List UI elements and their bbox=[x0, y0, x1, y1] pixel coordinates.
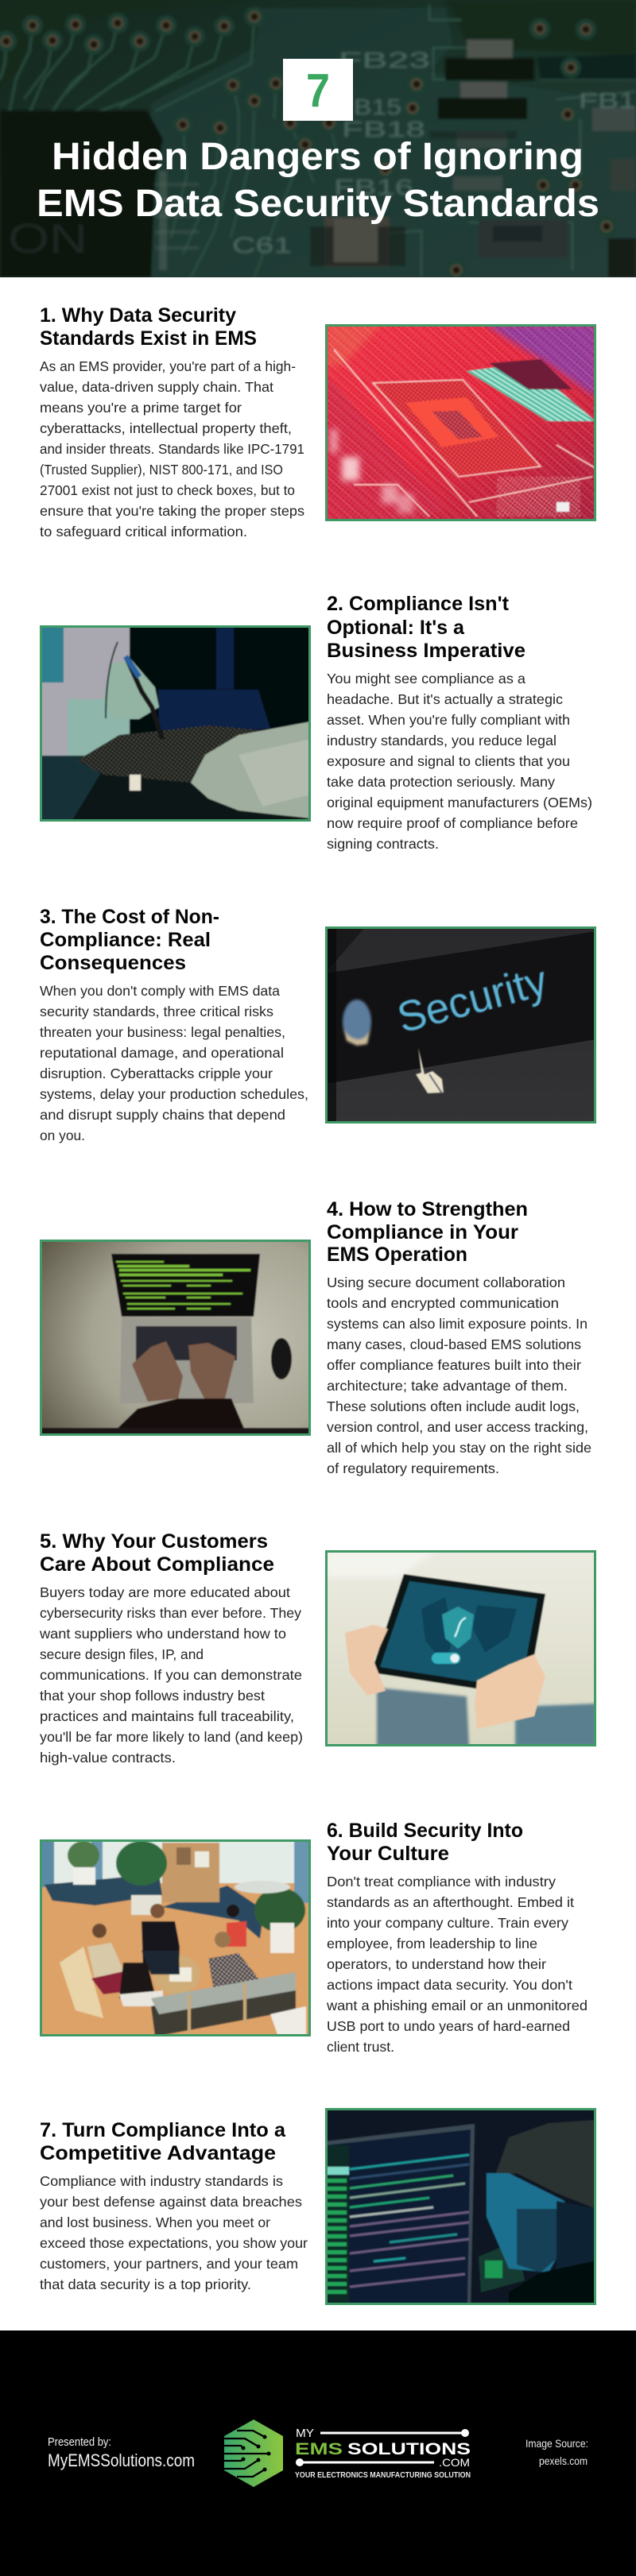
heading 1: Standards Exist in EMS bbox=[40, 327, 257, 350]
hero banner bbox=[0, 0, 636, 280]
body text 5: high-value contracts. bbox=[40, 1750, 176, 1766]
body text 2: take data protection seriously. Many bbox=[327, 774, 555, 790]
photo: security on screen with cursor: Security bbox=[393, 957, 553, 1042]
body text 6: want a phishing email or an unmonitored bbox=[326, 1998, 588, 2013]
body text 4 bbox=[327, 1274, 591, 1476]
title: Hidden Dangers of Ignoring bbox=[52, 136, 584, 178]
body text 4: Using secure document collaboration bbox=[327, 1274, 565, 1290]
heading 3: Consequences bbox=[40, 952, 186, 974]
body text 6 bbox=[326, 1874, 588, 2055]
body text 7: and lost business. When you meet or bbox=[40, 2214, 270, 2230]
heading 3: 3. The Cost of Non- bbox=[40, 906, 219, 928]
photo: soldering a circuit board bbox=[40, 625, 311, 822]
image source: pexels.com bbox=[539, 2454, 588, 2467]
body text 5: that your shop follows industry best bbox=[40, 1688, 265, 1704]
logo wordmark: SOLUTIONS bbox=[347, 2440, 471, 2458]
photo: hands typing on laptop bbox=[40, 1240, 311, 1436]
body text 4: many cases, cloud-based EMS solutions bbox=[327, 1336, 581, 1352]
title bbox=[37, 136, 599, 225]
panel: section 7 competitive advantage bbox=[40, 2108, 596, 2305]
panel: section 2 compliance imperative bbox=[40, 593, 592, 852]
heading 6: Your Culture bbox=[327, 1843, 449, 1865]
panel: section 3 cost of non-compliance bbox=[40, 906, 596, 1143]
presented by: Presented by: bbox=[48, 2435, 111, 2449]
body text 1: cyberattacks, intellectual property theft, bbox=[40, 420, 292, 436]
body text 4: systems can also limit exposure points. In bbox=[327, 1316, 588, 1332]
body text 1: value, data-driven supply chain. That bbox=[40, 379, 273, 395]
number badge bbox=[283, 59, 353, 121]
heading 2: Optional: It's a bbox=[327, 617, 465, 639]
body text 3: systems, delay your production schedules, bbox=[40, 1086, 308, 1102]
icon: green hexagon circuit bbox=[224, 2419, 283, 2487]
hero background photo: circuit board: FB18 bbox=[342, 117, 425, 141]
image source: Image Source: bbox=[525, 2437, 588, 2450]
footer band bbox=[0, 2330, 636, 2576]
heading 5: Care About Compliance bbox=[40, 1553, 274, 1576]
body text 6: Don't treat compliance with industry bbox=[327, 1874, 556, 1889]
body text 6: standards as an afterthought. Embed it bbox=[327, 1894, 574, 1910]
body text 6: client trust. bbox=[327, 2039, 394, 2055]
body text 1 bbox=[40, 358, 304, 540]
heading 6: 6. Build Security Into bbox=[327, 1820, 523, 1842]
logo wordmark: MY bbox=[296, 2427, 314, 2440]
body text 1: to safeguard critical information. bbox=[40, 524, 247, 540]
title: EMS Data Security Standards bbox=[37, 183, 599, 225]
body text 6: into your company culture. Train every bbox=[327, 1915, 568, 1931]
body text 2: signing contracts. bbox=[327, 836, 439, 852]
hero background photo: circuit board bbox=[0, 0, 636, 280]
body text 4: tools and encrypted communication bbox=[327, 1295, 559, 1311]
heading 4: 4. How to Strengthen bbox=[327, 1198, 528, 1220]
body text 5 bbox=[39, 1584, 303, 1766]
presented by bbox=[48, 2435, 195, 2470]
body text 3 bbox=[40, 983, 308, 1143]
heading 1 bbox=[40, 304, 257, 350]
heading 3 bbox=[40, 906, 219, 974]
heading 4: Compliance in Your bbox=[327, 1221, 518, 1244]
image source bbox=[525, 2437, 588, 2467]
body text 7: exceed those expectations, you show your bbox=[40, 2235, 308, 2251]
body text 2: You might see compliance as a bbox=[327, 671, 525, 687]
body text 2: asset. When you're fully compliant with bbox=[327, 712, 570, 728]
heading 4 bbox=[327, 1198, 528, 1266]
hero background photo: circuit board: FB1 bbox=[579, 88, 636, 113]
body text 6: employee, from leadership to line bbox=[327, 1936, 537, 1951]
body text 5: secure design files, IP, and bbox=[40, 1646, 204, 1662]
body text 2: original equipment manufacturers (OEMs) bbox=[327, 795, 592, 810]
hero background photo: circuit board: FB23 bbox=[339, 48, 430, 72]
photo: analyst at code monitor bbox=[325, 2108, 596, 2305]
body text 3: threaten your business: legal penalties, bbox=[40, 1024, 285, 1040]
photo: team meeting in office lounge bbox=[40, 1839, 311, 2036]
photo: red circuit board bbox=[325, 324, 596, 521]
heading 1: 1. Why Data Security bbox=[40, 304, 236, 327]
heading 7: Competitive Advantage bbox=[40, 2142, 276, 2164]
body text 4: version control, and user access tracking, bbox=[327, 1419, 588, 1435]
body text 2: headache. But it's actually a strategic bbox=[327, 691, 563, 707]
body text 7: Compliance with industry standards is bbox=[40, 2173, 283, 2189]
heading 3: Compliance: Real bbox=[40, 929, 211, 951]
body text 3: and disrupt supply chains that depend bbox=[40, 1107, 285, 1123]
hero background photo: circuit board: FB16 bbox=[334, 175, 413, 199]
body text 2: exposure and signal to clients that you bbox=[327, 753, 570, 769]
body text 2 bbox=[327, 671, 592, 852]
hero background photo: circuit board: C61 bbox=[232, 233, 292, 257]
body text 5: you'll be far more likely to land (and keep) bbox=[40, 1729, 303, 1745]
body text 4: all of which help you stay on the right side bbox=[327, 1440, 591, 1456]
heading 4: EMS Operation bbox=[327, 1244, 467, 1266]
heading 2: 2. Compliance Isn't bbox=[327, 593, 510, 615]
body text 1: means you're a prime target for bbox=[40, 400, 242, 416]
body text 5: practices and maintains full traceability, bbox=[40, 1708, 294, 1724]
heading 5 bbox=[40, 1530, 274, 1576]
body text 3: security standards, three critical risks bbox=[40, 1004, 273, 1019]
body text 7 bbox=[40, 2173, 308, 2292]
body text 3: disruption. Cyberattacks cripple your bbox=[40, 1066, 273, 1081]
body text 7: your best defense against data breaches bbox=[40, 2194, 302, 2210]
body text 5: want suppliers who understand how to bbox=[39, 1626, 286, 1642]
heading 2: Business Imperative bbox=[327, 640, 525, 662]
panel: section 4 strengthen compliance bbox=[40, 1198, 591, 1476]
panel: section 6 security culture bbox=[40, 1820, 588, 2055]
heading 2 bbox=[327, 593, 525, 662]
body text 4: These solutions often include audit logs, bbox=[327, 1398, 580, 1414]
body text 6: USB port to undo years of hard-earned bbox=[327, 2018, 570, 2034]
heading 5: 5. Why Your Customers bbox=[40, 1530, 268, 1553]
logo wordmark: EMS bbox=[295, 2440, 343, 2458]
logo wordmark bbox=[295, 2427, 471, 2480]
heading 7: 7. Turn Compliance Into a bbox=[40, 2119, 286, 2141]
panel: section 5 customers care bbox=[39, 1530, 596, 1766]
body text 1: As an EMS provider, you're part of a high- bbox=[40, 358, 296, 374]
heading 6 bbox=[327, 1820, 523, 1865]
body text 6: operators, to understand how their bbox=[327, 1956, 546, 1972]
photo: security on screen with cursor bbox=[325, 926, 596, 1124]
logo wordmark: YOUR ELECTRONICS MANUFACTURING SOLUTION bbox=[295, 2471, 471, 2480]
heading 7 bbox=[40, 2119, 286, 2164]
logo wordmark: .COM bbox=[439, 2456, 470, 2469]
number badge: 7 bbox=[306, 64, 330, 117]
body text 3: reputational damage, and operational bbox=[40, 1045, 284, 1061]
logo: MY EMS Solutions bbox=[224, 2419, 471, 2487]
body text 7: customers, your partners, and your team bbox=[40, 2256, 298, 2272]
body text 3: on you. bbox=[40, 1127, 85, 1143]
body text 1: and insider threats. Standards like IPC-1791 bbox=[40, 441, 304, 457]
body text 4: of regulatory requirements. bbox=[327, 1460, 499, 1476]
body text 6: actions impact data security. You don't bbox=[327, 1977, 572, 1993]
panel: section 1 why standards exist bbox=[40, 304, 596, 540]
body text 5: cybersecurity risks than ever before. They bbox=[40, 1605, 301, 1621]
body text 4: architecture; take advantage of them. bbox=[327, 1378, 568, 1394]
body text 4: offer compliance features built into their bbox=[327, 1357, 581, 1373]
hero background photo: circuit board: B15 bbox=[354, 95, 401, 119]
body text 1: 27001 exist not just to check boxes, but to bbox=[40, 482, 295, 498]
body text 3: When you don't comply with EMS data bbox=[40, 983, 280, 999]
hero background photo: circuit board: ON bbox=[8, 216, 87, 262]
body text 2: industry standards, you reduce legal bbox=[327, 733, 556, 748]
body text 5: Buyers today are more educated about bbox=[40, 1584, 290, 1600]
body text 1: ensure that you're taking the proper steps bbox=[40, 503, 304, 519]
body text 2: now require proof of compliance before bbox=[327, 815, 578, 831]
body text 1: (Trusted Supplier), NIST 800-171, and ISO bbox=[40, 462, 283, 478]
body text 7: that data security is a top priority. bbox=[40, 2276, 251, 2292]
photo: hands holding tablet with VPN shield bbox=[325, 1550, 596, 1746]
presented by: MyEMSSolutions.com bbox=[48, 2450, 195, 2470]
body text 5: communications. If you can demonstrate bbox=[40, 1667, 302, 1683]
